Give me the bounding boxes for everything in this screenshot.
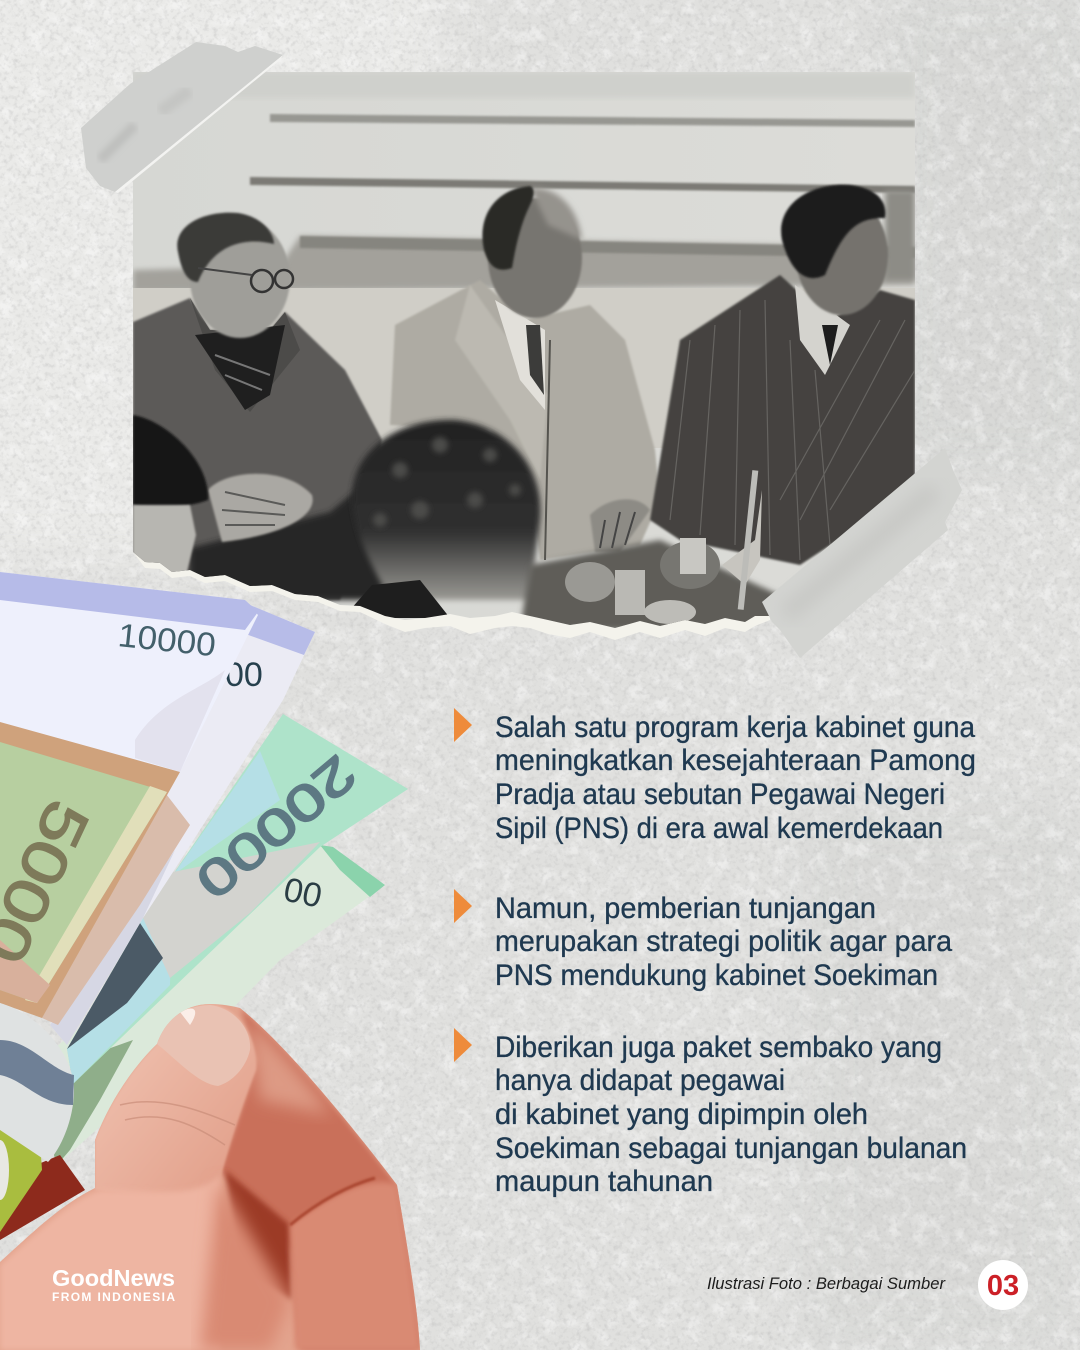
text block 1: meningkatkan kesejahteraan Pamong: [495, 744, 976, 777]
text block 3: [495, 1031, 967, 1198]
white round card: [0, 1003, 74, 1162]
left man: [133, 213, 400, 600]
note: 5000 green: [0, 722, 180, 1018]
photo credit: Ilustrasi Foto : Berbagai Sumber: [707, 1274, 946, 1293]
note: 20000 mint: [67, 714, 408, 1084]
note: second 10000: [50, 605, 315, 1045]
text block 1: Salah satu program kerja kabinet guna: [495, 711, 975, 744]
page number badge: [978, 1260, 1028, 1310]
historic photo: three men at a table: [133, 72, 915, 640]
text block 3: Soekiman sebagai tunjangan bulanan: [495, 1132, 967, 1165]
page number badge: 03: [987, 1270, 1019, 1302]
arrow bullet 1: [454, 708, 472, 742]
text block 3: hanya didapat pegawai: [495, 1064, 785, 1097]
text block 3: Diberikan juga paket sembako yang: [495, 1031, 942, 1064]
money fan illustration: [0, 572, 408, 1240]
foreground heads: [133, 415, 540, 618]
right man: [650, 185, 915, 565]
text block 2: merupakan strategi politik agar para: [495, 925, 952, 958]
note: back green: 00: [280, 871, 325, 916]
text block 1: Pradja atau sebutan Pegawai Negeri: [495, 778, 945, 811]
text block 3: di kabinet yang dipimpin oleh: [495, 1098, 868, 1131]
text block 2: [495, 892, 952, 992]
pink note edge: [42, 790, 190, 1025]
logo: GoodNews from Indonesia: FROM INDONESIA: [52, 1290, 175, 1304]
arrow bullet 2: [454, 889, 472, 923]
tape: top left: [81, 42, 283, 193]
text block 2: Namun, pemberian tunjangan: [495, 892, 876, 925]
note: 10000 front: [0, 572, 258, 772]
tape: bottom right: [762, 448, 962, 658]
text block 3: maupun tahunan: [495, 1165, 713, 1198]
red and green objects at bottom left: [0, 1120, 85, 1240]
text block 1: [495, 711, 976, 845]
note: 10000 front: 10000: [116, 616, 218, 663]
text block 1: Sipil (PNS) di era awal kemerdekaan: [495, 812, 943, 845]
note: 20000 mint: 20000: [185, 745, 367, 910]
note: back green: [40, 845, 385, 1165]
logo: GoodNews from Indonesia: GoodNews: [52, 1265, 175, 1291]
arrow bullet 3: [454, 1028, 472, 1062]
note: second 10000: 00: [225, 656, 263, 694]
wall: [133, 72, 915, 632]
text block 2: PNS mendukung kabinet Soekiman: [495, 959, 938, 992]
logo: GoodNews from Indonesia: [52, 1265, 175, 1304]
middle man: [390, 186, 660, 560]
table, cups and flag: [520, 470, 790, 630]
hand holding the notes: [0, 1000, 430, 1350]
